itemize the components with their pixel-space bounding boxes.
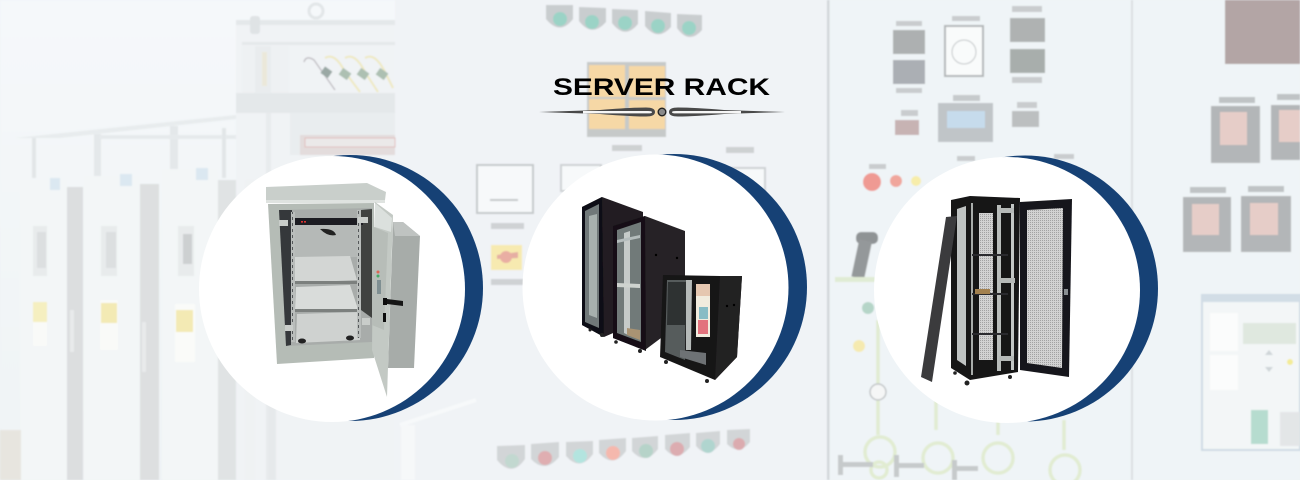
- background: meters and selector in centre panel: [477, 165, 765, 285]
- navy crescent 1: [217, 155, 483, 421]
- background: right-hand digital meters and relay: [1183, 0, 1300, 450]
- background: top green push buttons: [546, 5, 702, 37]
- background: orange annunciator block: [587, 62, 754, 153]
- background: bottom push buttons: [497, 429, 750, 469]
- background: instruments of mimic panel: [863, 6, 1074, 191]
- navy crescent 2: [541, 154, 807, 420]
- panel: open-door perforated rack product: [874, 156, 1158, 423]
- photo: black rack with open mesh door and leaning side panel: [921, 196, 1072, 386]
- white circle 2: [522, 154, 788, 420]
- panel: black network cabinets product: [522, 154, 807, 420]
- navy crescent 3: [892, 156, 1158, 422]
- ornamental divider under heading: [539, 108, 785, 116]
- photo: three black glass-door server racks: [582, 197, 742, 383]
- background: tall frame with cables and terminal block: [236, 4, 476, 480]
- white circle 1: [199, 156, 465, 422]
- background: left cabinets and canopy: [0, 115, 245, 480]
- panel: outdoor cabinet product: [199, 155, 483, 422]
- heading: SERVER RACK: SERVER RACK: [553, 74, 770, 101]
- background: mimic diagram with handle, lamps and rings: [835, 232, 1080, 480]
- white circle 3: [874, 157, 1140, 423]
- photo: grey outdoor server cabinet with open door: [266, 183, 420, 397]
